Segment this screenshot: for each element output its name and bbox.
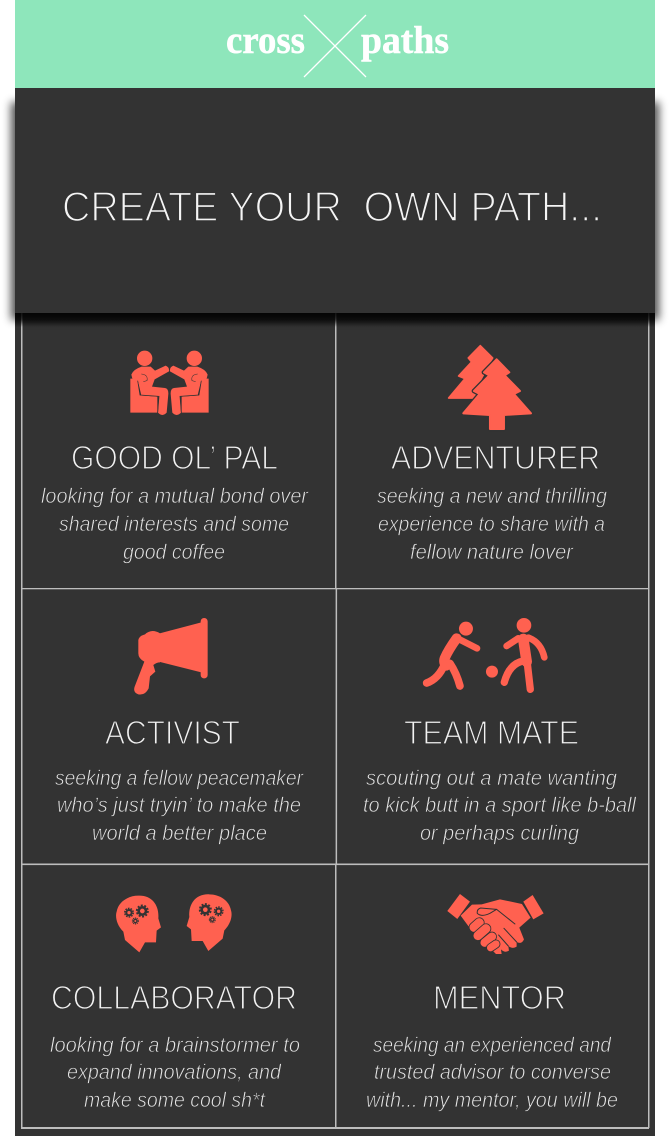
description: experience to share with a [378,513,605,536]
icon: pine trees [449,346,531,429]
description: to kick butt in a sport like b-ball [363,794,637,817]
description: fellow nature lover [410,541,574,564]
header band [15,0,655,88]
description: or perhaps curling [420,822,579,845]
description: seeking a fellow peacemaker [55,767,304,790]
description [363,767,637,845]
heading: ADVENTURER [391,439,600,476]
description: trusted advisor to converse [374,1061,611,1084]
logo: paths [361,19,449,62]
description: who’s just tryin’ to make the [57,794,301,817]
icon: two players with ball [427,618,544,689]
heading: TEAM MATE [404,714,579,751]
hero panel [15,88,655,313]
description: seeking a new and thrilling [377,485,607,508]
description: looking for a mutual bond over [41,485,309,508]
description [50,1034,300,1112]
description [41,485,309,564]
icon: megaphone [134,618,208,695]
description: seeking an experienced and [373,1034,612,1057]
icon: two heads with gears [116,894,232,952]
description: shared interests and some [59,513,289,536]
description: scouting out a mate wanting [366,767,617,790]
description: world a better place [92,822,267,845]
heading: MENTOR [433,979,566,1016]
heading: GOOD OL’ PAL [71,439,278,476]
panel: adventurer [377,346,607,564]
hero title: CREATE YOUR OWN PATH... [62,183,602,230]
description: good coffee [123,541,225,564]
description [377,485,607,564]
logo: cross [226,19,305,62]
description: make some cool sh*t [84,1089,266,1112]
panel: collaborator [50,894,300,1112]
description: expand innovations, and [67,1061,282,1084]
panel: activist [55,618,304,845]
description: looking for a brainstormer to [50,1034,300,1057]
panel: good ol' pal [41,351,309,564]
description [366,1034,618,1112]
description: with... my mentor, you will be [366,1089,618,1112]
heading: COLLABORATOR [51,979,297,1016]
icon: handshake [447,894,544,954]
description [55,767,304,845]
heading: ACTIVIST [105,714,240,751]
logo [226,15,449,77]
panel: team mate [363,618,637,845]
panel: mentor [366,894,618,1112]
icon: two friends talking [130,351,209,415]
